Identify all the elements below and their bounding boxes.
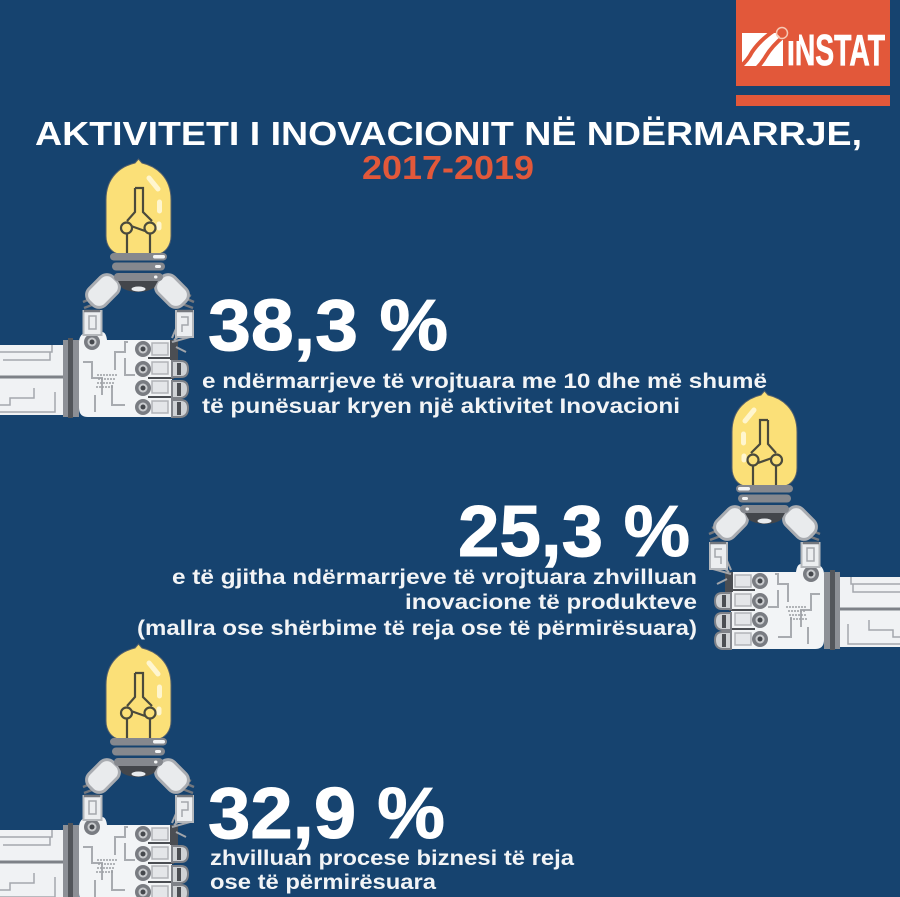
- description 3: ose të përmirësuara: [210, 871, 436, 894]
- description 3: zhvilluan procese biznesi të reja: [210, 847, 574, 870]
- icon: robot hand holding light bulb 1: [0, 159, 194, 418]
- value 38,3 %: 38,3 %: [208, 286, 448, 366]
- description 2: inovacione të produkteve: [405, 591, 697, 614]
- logo: INSTAT: [736, 0, 890, 106]
- value 25,3 %: 25,3 %: [458, 492, 690, 572]
- icon: robot hand holding light bulb 3: [0, 644, 194, 897]
- statistic block 3: [208, 774, 574, 894]
- description 3: [210, 847, 574, 894]
- value 32,9 %: 32,9 %: [208, 774, 445, 854]
- description 2: [137, 566, 697, 640]
- description 1: e ndërmarrjeve të vrojtuara me 10 dhe më shumë: [202, 370, 767, 393]
- title years: 2017-2019: [362, 149, 534, 186]
- statistic block 1: [202, 286, 767, 418]
- description 1: [202, 370, 767, 418]
- icon: robot hand holding light bulb 2: [709, 391, 900, 650]
- title: AKTIVITETI I INOVACIONIT NË NDËRMARRJE,: [35, 115, 862, 152]
- title: [35, 115, 862, 186]
- description 1: të punësuar kryen një aktivitet Inovacioni: [202, 395, 680, 418]
- description 2: (mallra ose shërbime të reja ose të përmirësuara): [137, 617, 697, 640]
- description 2: e të gjitha ndërmarrjeve të vrojtuara zhvilluan: [172, 566, 697, 589]
- statistic block 2: [137, 492, 697, 640]
